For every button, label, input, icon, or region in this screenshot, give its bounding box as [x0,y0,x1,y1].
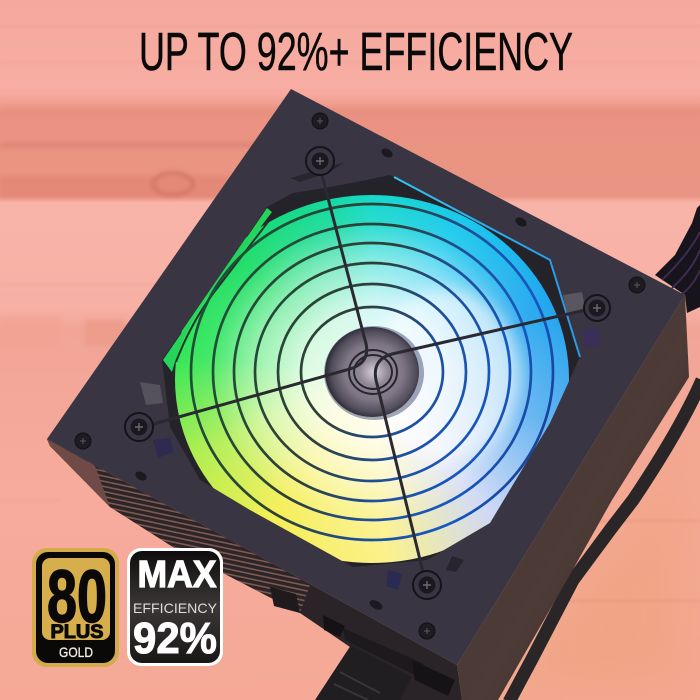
power socket and plug [270,587,455,700]
psu top plate [47,89,685,665]
cyan edge highlight [394,177,580,357]
badge: 80 plus gold: PLUS [50,622,104,643]
badge: 80 plus gold [32,548,119,667]
corner screws [75,113,645,639]
psu side left with vent hatch [47,439,462,700]
mounting tabs [140,162,600,590]
badge: 80 plus gold: 80 [47,555,107,638]
grille mount screws [125,147,610,599]
badge: max efficiency 92% [127,548,223,666]
fan light [175,195,569,563]
grille wires [150,175,590,572]
small slots [134,147,528,612]
psu side right [457,295,689,700]
badge: max efficiency 92%: 92% [133,614,217,663]
dark line inside green edge [176,222,268,362]
badge: max efficiency 92%: EFFICIENCY [133,600,218,616]
green edge sliver [163,208,272,372]
badge: 80 plus gold: GOLD [59,645,93,660]
fan hub [324,326,424,420]
power cables top right [655,205,700,313]
fan opening [150,175,590,580]
black cable right [509,380,700,700]
badge: max efficiency 92%: MAX [138,554,217,596]
fan grille rings [191,204,553,540]
